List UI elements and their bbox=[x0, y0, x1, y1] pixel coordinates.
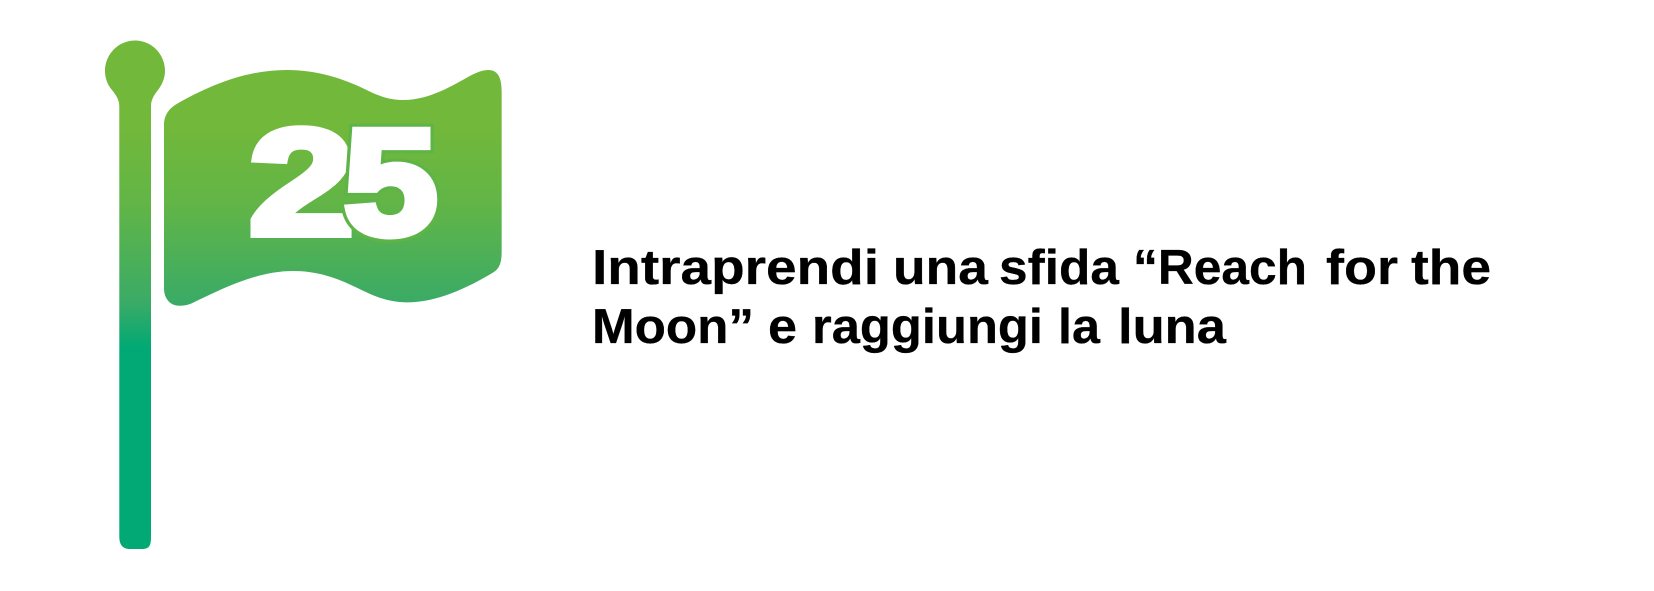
heading text bbox=[592, 241, 1491, 354]
number 25 bbox=[249, 98, 437, 267]
heading line 1 bbox=[592, 241, 1491, 295]
heading line 2 bbox=[592, 300, 1227, 354]
heading line 1: Intraprendi bbox=[592, 241, 879, 295]
digit 5 outline: 5 bbox=[344, 98, 437, 266]
heading line 1: for bbox=[1326, 241, 1398, 295]
flag banner bbox=[164, 70, 502, 306]
heading line 2: Moon” bbox=[592, 300, 754, 354]
heading line 2: la bbox=[1058, 300, 1101, 354]
heading line 2: luna bbox=[1118, 300, 1227, 354]
flag pole bbox=[105, 40, 165, 549]
heading line 1: “Reach bbox=[1133, 241, 1307, 295]
heading line 1: una bbox=[893, 241, 989, 295]
icon: flag with number 25 bbox=[105, 40, 502, 549]
heading line 2: raggiungi bbox=[812, 300, 1043, 354]
heading line 2: e bbox=[768, 300, 797, 354]
digit 2: 2 bbox=[249, 99, 354, 267]
heading line 1: sfida bbox=[999, 241, 1120, 295]
heading line 1: the bbox=[1411, 241, 1491, 295]
digit 5: 5 bbox=[344, 98, 437, 266]
